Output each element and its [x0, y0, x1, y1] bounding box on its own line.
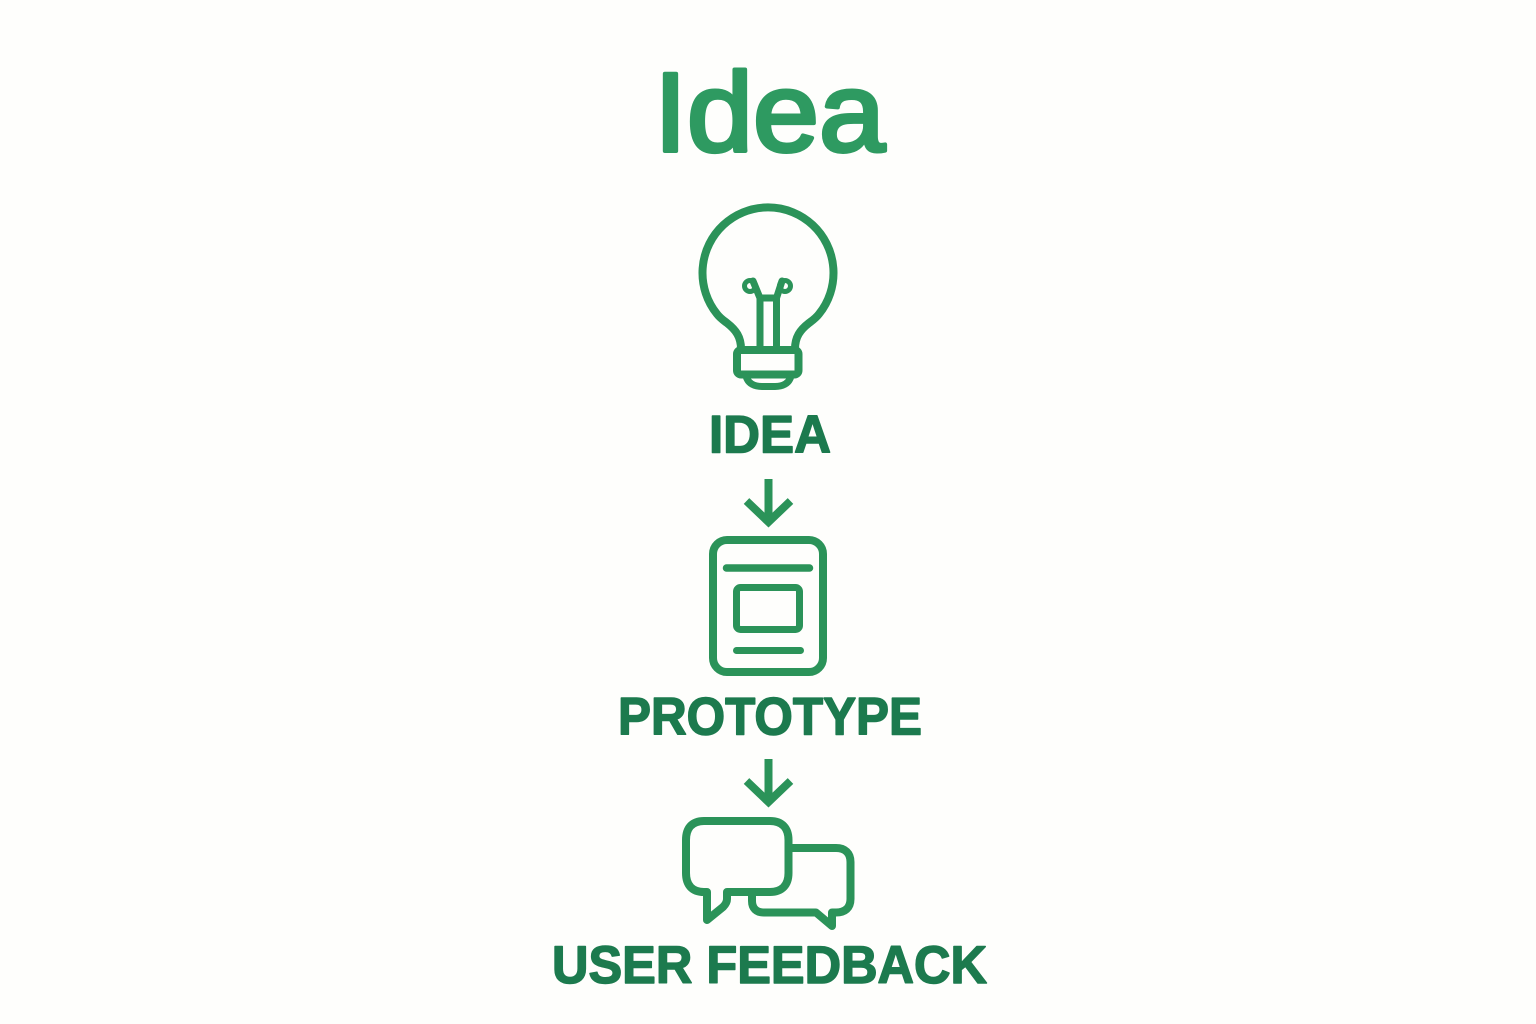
icon: light bulb	[702, 207, 834, 386]
label: idea: IDEA	[709, 406, 831, 464]
icon: prototype page	[713, 540, 823, 672]
arrow: prototype to user feedback	[746, 759, 790, 802]
label: prototype: PROTOTYPE	[618, 688, 922, 746]
icon: speech bubbles	[686, 821, 850, 926]
label: user feedback: USER FEEDBACK	[552, 936, 987, 995]
arrow: idea to prototype	[746, 479, 790, 522]
title: Idea	[654, 50, 886, 175]
